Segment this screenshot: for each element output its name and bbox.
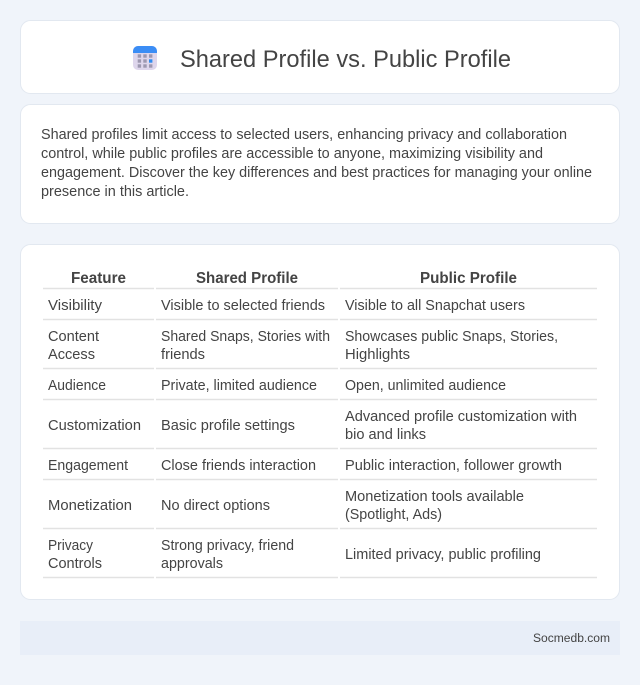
- row: Audience: Open, unlimited audience: [345, 378, 506, 394]
- text block: introduction: control, while public profiles are accessible to anyone, maximizing visibility and: [41, 146, 543, 162]
- text block: introduction: [41, 127, 592, 200]
- footer text: Socmedb.com: [533, 631, 610, 645]
- row: Content Access: Showcases public Snaps, Stories,: [345, 329, 558, 345]
- row: Visibility: Visible to selected friends: [161, 298, 325, 314]
- panel: intro text card: [20, 104, 620, 224]
- text block: introduction: engagement. Discover the key differences and best practices for managing your online: [41, 165, 592, 181]
- panel: comparison table card: [20, 244, 620, 600]
- table header row: [71, 270, 517, 287]
- row: Content Access: Highlights: [345, 347, 410, 363]
- row: Content Access: Content: [48, 329, 99, 345]
- text block: introduction: presence in this article.: [41, 184, 189, 200]
- row: Visibility: [48, 298, 525, 314]
- row: Content Access: friends: [161, 347, 205, 363]
- row: Audience: Private, limited audience: [161, 378, 317, 394]
- row: Audience: [48, 378, 506, 394]
- row: Customization: Advanced profile customization with: [345, 409, 577, 425]
- row: Engagement: [48, 458, 562, 474]
- text block: introduction: Shared profiles limit access to selected users, enhancing privacy and collaboration: [41, 127, 567, 143]
- row: Privacy Controls: Controls: [48, 556, 102, 572]
- row: Monetization: No direct options: [161, 498, 270, 514]
- panel: title card: [20, 20, 620, 94]
- table header row: Shared Profile: [196, 270, 298, 287]
- row: Monetization: Monetization tools available: [345, 489, 524, 505]
- row: Visibility: Visibility: [48, 298, 103, 314]
- table header row: Feature: [71, 270, 126, 287]
- row: Content Access: Access: [48, 347, 95, 363]
- row: Monetization: Monetization: [48, 498, 132, 514]
- row: Engagement: Engagement: [48, 458, 128, 474]
- row: Customization: Basic profile settings: [161, 418, 295, 434]
- row: Content Access: Shared Snaps, Stories with: [161, 329, 330, 345]
- icon: calendar: [133, 46, 157, 70]
- row: Monetization: [48, 489, 524, 523]
- table header row: Public Profile: [420, 270, 517, 287]
- row: Privacy Controls: Privacy: [48, 538, 94, 554]
- row: Privacy Controls: Strong privacy, friend: [161, 538, 294, 554]
- row: Audience: Audience: [48, 378, 106, 394]
- row: Customization: bio and links: [345, 427, 426, 443]
- row: Privacy Controls: approvals: [161, 556, 223, 572]
- row: Visibility: Visible to all Snapchat users: [345, 298, 525, 314]
- row: Engagement: Close friends interaction: [161, 458, 316, 474]
- row: Privacy Controls: Limited privacy, public profiling: [345, 547, 541, 563]
- row: Monetization: (Spotlight, Ads): [345, 507, 442, 523]
- row: Content Access: [48, 329, 558, 363]
- footer: [20, 621, 620, 655]
- row: Customization: [48, 409, 577, 443]
- row: Engagement: Public interaction, follower growth: [345, 458, 562, 474]
- title: Shared Profile vs. Public Profile: [180, 46, 511, 73]
- row: Customization: Customization: [48, 418, 141, 434]
- row: Privacy Controls: [48, 538, 541, 572]
